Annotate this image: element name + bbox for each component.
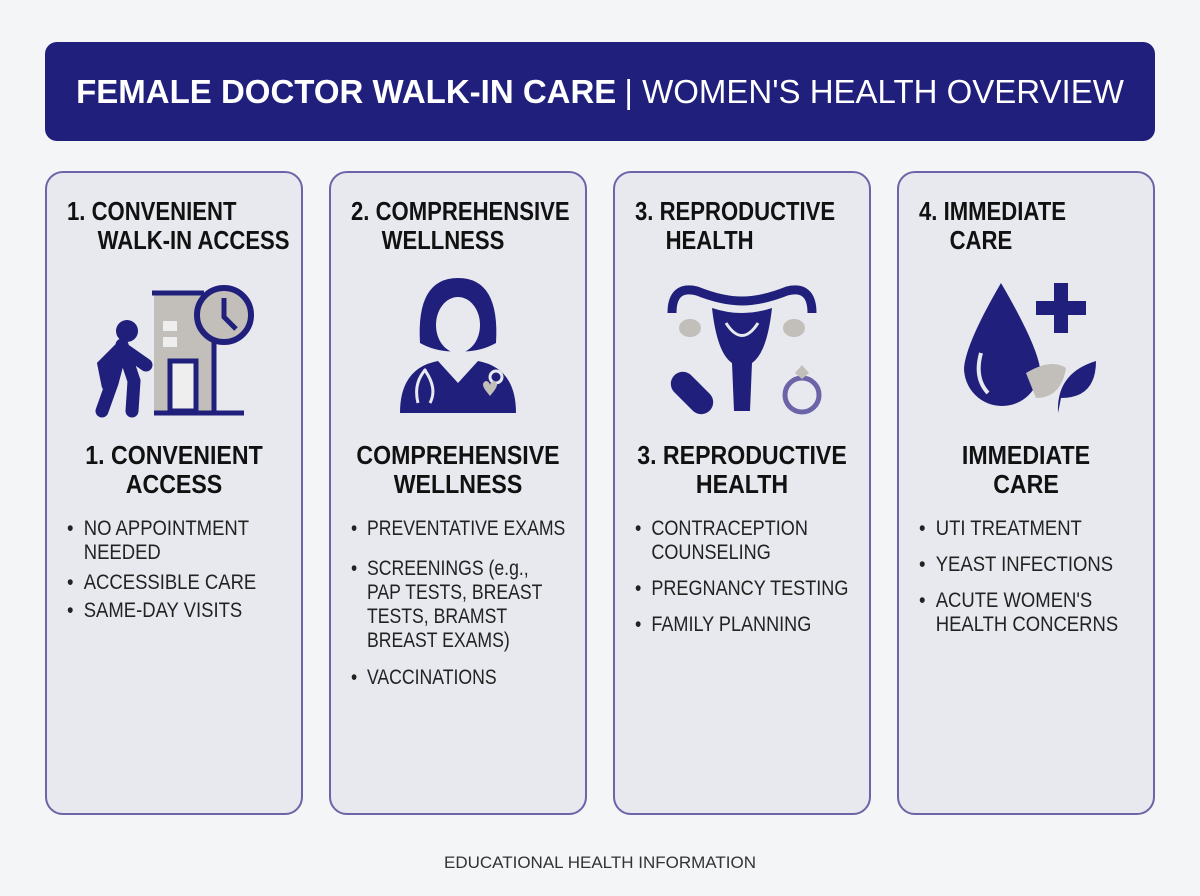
subheading 3 [637, 440, 847, 499]
subheading 1 [85, 440, 263, 499]
bullets 4 [920, 517, 1118, 636]
footer: EDUCATIONAL HEALTH INFORMATION [444, 853, 756, 872]
bullets 3: COUNSELING [651, 541, 771, 564]
subheading 3: 3. REPRODUCTIVE [637, 440, 847, 470]
subheading 4: IMMEDIATE [962, 440, 1090, 470]
bullets 1: ACCESSIBLE CARE [84, 571, 256, 594]
title: FEMALE DOCTOR WALK-IN CARE [76, 72, 616, 110]
subheading 2: COMPREHENSIVE [356, 440, 560, 470]
heading 2: WELLNESS [382, 225, 504, 255]
heading 1: 1. CONVENIENT [67, 196, 236, 226]
heading 1 [67, 196, 290, 255]
icon: walking person building clock [96, 285, 254, 418]
icon: uterus pill ring [668, 285, 822, 414]
bullets 2: SCREENINGS (e.g., [367, 557, 529, 580]
subheading 4 [962, 440, 1090, 499]
bullets 3: FAMILY PLANNING [651, 613, 811, 636]
title [45, 42, 1155, 141]
subheading 2: WELLNESS [394, 469, 522, 499]
bullets 2: VACCINATIONS [367, 666, 497, 689]
heading 3: 3. REPRODUCTIVE [635, 196, 835, 226]
bullets 4: HEALTH CONCERNS [936, 613, 1118, 636]
heading 1: WALK-IN ACCESS [98, 225, 290, 255]
bullets 1 [68, 517, 256, 622]
bullets 1: SAME-DAY VISITS [84, 599, 242, 622]
bullets 2: BREAST EXAMS) [367, 629, 510, 652]
panel: reproductive health [613, 171, 871, 815]
subheading 1: 1. CONVENIENT [85, 440, 263, 470]
bullets 3: CONTRACEPTION [651, 517, 808, 540]
icon: drop plus leaf [964, 283, 1096, 413]
panel: convenient access [45, 171, 303, 815]
subheading 1: ACCESS [126, 469, 222, 499]
subheading 3: HEALTH [696, 469, 788, 499]
bullets 4: UTI TREATMENT [936, 517, 1082, 540]
bullets 3 [636, 517, 848, 636]
title: | WOMEN'S HEALTH OVERVIEW [624, 72, 1124, 110]
heading 3 [635, 196, 835, 255]
bullets 4: ACUTE WOMEN'S [936, 589, 1092, 612]
bullets 4: YEAST INFECTIONS [936, 553, 1113, 576]
bullets 1: NO APPOINTMENT [84, 517, 249, 540]
heading 4: 4. IMMEDIATE [919, 196, 1066, 226]
bullets 3: PREGNANCY TESTING [651, 577, 848, 600]
heading 2 [351, 196, 570, 255]
panel: comprehensive wellness [329, 171, 587, 815]
bullets 2: TESTS, BRAMST [367, 605, 507, 628]
icon: female doctor [400, 278, 516, 413]
panel: immediate care [897, 171, 1155, 815]
bullets 2: PREVENTATIVE EXAMS [367, 517, 565, 540]
heading 3: HEALTH [666, 225, 754, 255]
heading 2: 2. COMPREHENSIVE [351, 196, 570, 226]
bullets 2: PAP TESTS, BREAST [367, 581, 542, 604]
heading 4: CARE [950, 225, 1012, 255]
heading 4 [919, 196, 1066, 255]
bullets 2 [352, 517, 565, 689]
subheading 2 [356, 440, 560, 499]
bullets 1: NEEDED [84, 541, 161, 564]
subheading 4: CARE [993, 469, 1059, 499]
